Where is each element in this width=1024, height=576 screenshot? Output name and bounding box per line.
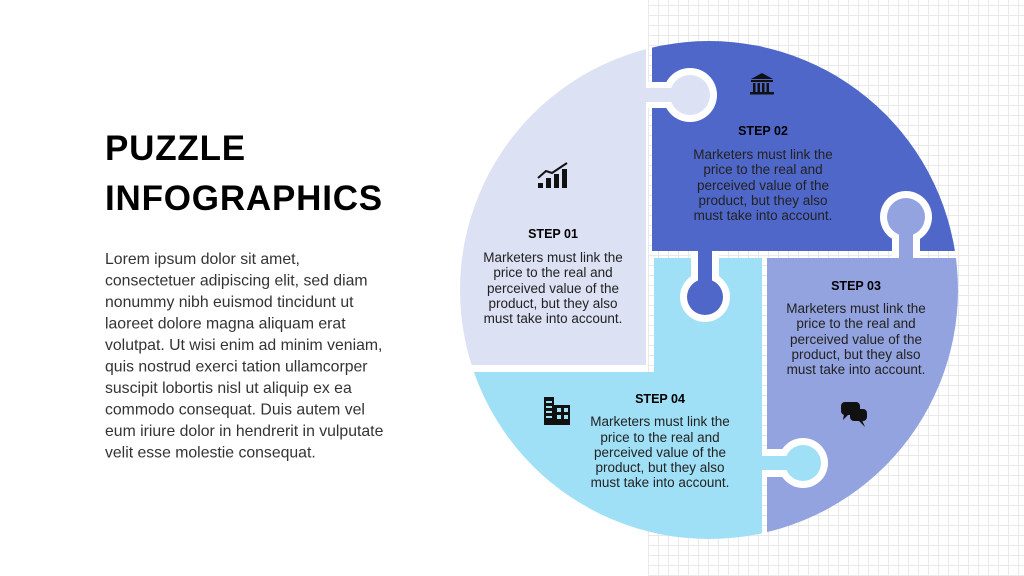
knob: step4 into step3	[756, 438, 828, 488]
step 02 text: product, but they also	[698, 193, 828, 208]
piece: step 01	[460, 49, 646, 365]
body text: velit esse molestie consequat.	[105, 444, 316, 462]
body text: commodo consequat. Duis autem vel	[105, 402, 365, 418]
step 03 text: perceived value of the	[790, 332, 922, 347]
piece: step 03	[767, 258, 958, 532]
title: INFOGRAPHICS	[105, 179, 383, 218]
step 04 text: must take into account.	[591, 475, 729, 490]
body text	[105, 251, 384, 462]
step 03 text	[786, 279, 926, 377]
step 02 text: Marketers must link the	[693, 147, 833, 162]
step 01 text: perceived value of the	[487, 281, 619, 296]
knob: step1 into step2	[640, 68, 717, 122]
step 03 text: must take into account.	[787, 362, 925, 377]
piece: step 02	[652, 41, 955, 251]
step 04 text: perceived value of the	[594, 445, 726, 460]
body text: eum iriure dolor in hendrerit in vulputate	[105, 423, 384, 440]
step 03 text: price to the real and	[796, 316, 916, 331]
step 04 text: price to the real and	[600, 430, 720, 445]
body text: nonummy nibh euismod tincidunt ut	[105, 294, 354, 311]
step 02 text: perceived value of the	[697, 178, 829, 193]
body text: consectetuer adipiscing elit, sed diam	[105, 272, 368, 290]
step 04 text: Marketers must link the	[590, 414, 730, 429]
puzzle circle	[460, 41, 958, 539]
icon: building	[544, 397, 570, 425]
step 01 text: price to the real and	[493, 265, 613, 280]
step 03 text: product, but they also	[791, 347, 921, 362]
body text: Lorem ipsum dolor sit amet,	[105, 251, 300, 268]
step 01 text: STEP 01	[528, 227, 578, 241]
knob: step3 into step2	[880, 191, 932, 264]
icon: chart	[538, 163, 567, 188]
step 03 text: Marketers must link the	[786, 301, 926, 316]
body text: suscipit lobortis nisl ut aliquip ex ea	[105, 380, 352, 397]
step 01 text: must take into account.	[484, 311, 622, 326]
body text: quis nostrud exerci tation ullamcorper	[105, 358, 368, 376]
step 02 text: price to the real and	[703, 162, 823, 177]
step 01 text: Marketers must link the	[483, 250, 623, 265]
body text: laoreet dolore magna aliquam erat	[105, 316, 346, 332]
knob: step2 into step4	[680, 245, 730, 322]
step 02 text: STEP 02	[738, 124, 788, 138]
step 04 text	[590, 392, 730, 490]
title	[105, 129, 383, 218]
piece: step 04	[474, 258, 762, 539]
title: PUZZLE	[105, 129, 246, 168]
step 04 text: product, but they also	[595, 460, 725, 475]
icon: chat	[841, 402, 867, 427]
step 02 text: must take into account.	[694, 208, 832, 223]
step 04 text: STEP 04	[635, 392, 685, 406]
step 01 text	[483, 227, 623, 326]
step 03 text: STEP 03	[831, 279, 881, 293]
body text: volutpat. Ut wisi enim ad minim veniam,	[105, 337, 382, 354]
icon: bank	[750, 73, 774, 94]
step 02 text	[693, 124, 833, 223]
step 01 text: product, but they also	[488, 296, 618, 311]
